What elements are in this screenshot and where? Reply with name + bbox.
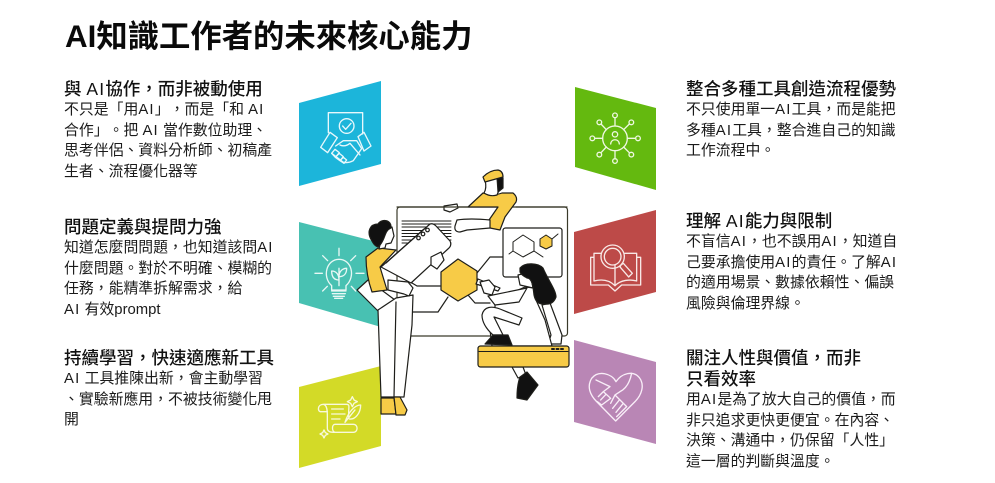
- text block: understand AI limits: 理解 AI能力與限制: [686, 211, 832, 231]
- whiteboard: [397, 207, 568, 336]
- person: woman seated drawing: [476, 264, 569, 400]
- text block: understand AI limits: 己要承擔使用AI的責任。了解AI: [686, 255, 897, 271]
- person: man on top: [397, 170, 567, 232]
- text block: understand AI limits: 的適用場景、數據依賴性、偏誤: [686, 275, 894, 291]
- panel: heart purple: [574, 340, 656, 444]
- text block: problem definition: AI 有效prompt: [64, 302, 161, 318]
- title: AI知識工作者的未來核心能力: [65, 18, 472, 54]
- text block: integrate tools: 不只使用單一AI工具，而是能把: [686, 102, 896, 118]
- text block: integrate tools: [686, 79, 896, 159]
- text block: problem definition: 什麼問題。對於不明確、模糊的: [64, 261, 272, 277]
- text block: integrate tools: 整合多種工具創造流程優勢: [686, 79, 896, 99]
- text block: continuous learning: [64, 348, 274, 428]
- text block: continuous learning: AI 工具推陳出新，會主動學習: [64, 371, 263, 387]
- panel: book red: [574, 210, 656, 314]
- icon: heart with hands: [589, 373, 642, 421]
- text block: collaborate with AI: 生者、流程優化器等: [64, 164, 198, 180]
- text block: continuous learning: 、實驗新應用，不被技術變化甩: [64, 392, 272, 408]
- text block: humanity and value: 決策、溝通中，仍保留「人性」: [686, 433, 894, 449]
- icon: network person: [590, 113, 640, 163]
- panel: scroll yellow-green: [299, 366, 381, 468]
- panel: network green: [575, 87, 656, 190]
- text block: humanity and value: [686, 348, 896, 470]
- text block: problem definition: 問題定義與提問力強: [64, 217, 222, 237]
- text block: integrate tools: 多種AI工具，整合進自己的知識: [686, 123, 896, 139]
- text block: collaborate with AI: 合作」。把 AI 當作數位助理、: [64, 123, 267, 139]
- icon: book and magnifier: [591, 245, 641, 291]
- text block: problem definition: [64, 217, 274, 318]
- icon: handshake: [321, 113, 371, 163]
- icon: lightbulb: [315, 248, 364, 298]
- text block: collaborate with AI: [64, 79, 272, 180]
- text block: humanity and value: 只看效率: [686, 369, 756, 389]
- icon: scroll and quill: [318, 397, 361, 438]
- text block: humanity and value: 關注人性與價值，而非: [686, 348, 861, 368]
- panel: handshake blue: [299, 81, 381, 186]
- text block: humanity and value: 這一層的判斷與溫度。: [686, 454, 835, 470]
- text block: integrate tools: 工作流程中。: [686, 143, 775, 159]
- text block: problem definition: 知道怎麼問問題，也知道該問AI: [64, 240, 274, 256]
- text block: continuous learning: 開: [64, 412, 79, 428]
- text block: continuous learning: 持續學習，快速適應新工具: [64, 348, 274, 368]
- text block: understand AI limits: 風險與倫理界線。: [686, 296, 805, 312]
- text block: collaborate with AI: 不只是「用AI」，而是「和 AI: [64, 102, 265, 118]
- text block: humanity and value: 用AI是為了放大自己的價值，而: [686, 392, 896, 408]
- panel: lightbulb teal: [299, 222, 381, 327]
- text block: collaborate with AI: 思考伴侶、資料分析師、初稿產: [64, 143, 272, 159]
- person: left standing with tablet: [357, 221, 451, 415]
- text block: collaborate with AI: 與 AI協作，而非被動使用: [64, 79, 263, 99]
- text block: understand AI limits: [686, 211, 897, 312]
- text block: problem definition: 任務，能精準拆解需求，給: [64, 281, 242, 297]
- text block: humanity and value: 非只追求更快更便宜。在內容、: [686, 413, 894, 429]
- text block: understand AI limits: 不盲信AI，也不誤用AI，知道自: [686, 234, 897, 250]
- chart panel with molecules: [503, 228, 562, 277]
- illustration: three people at whiteboard: [357, 170, 569, 415]
- central yellow hexagon: [441, 259, 477, 301]
